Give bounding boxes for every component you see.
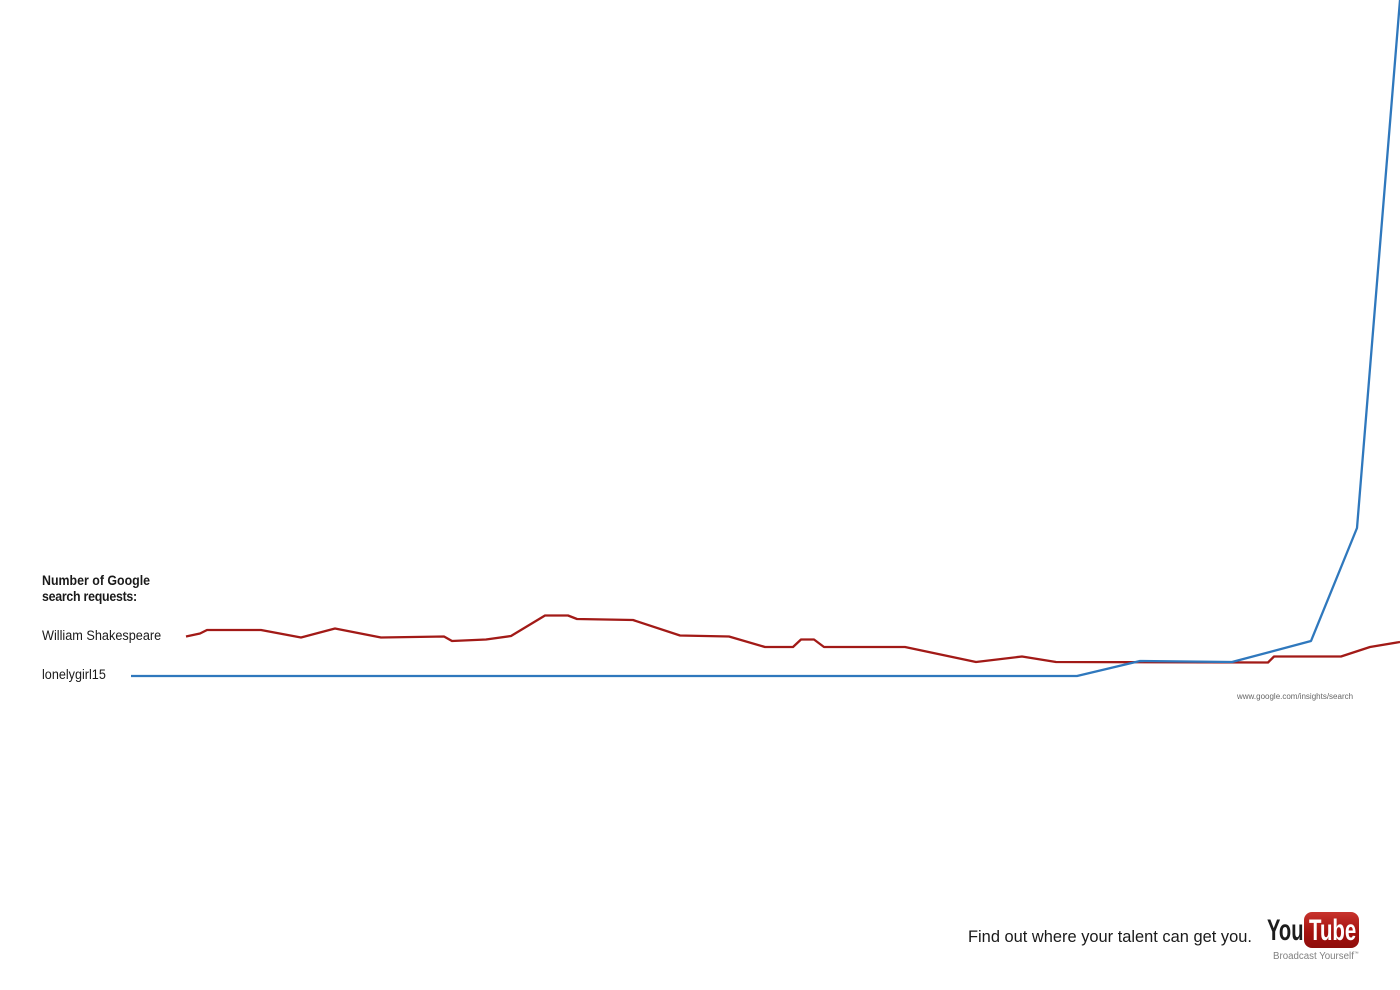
series: lonelygirl15	[131, 0, 1400, 676]
series: William Shakespeare	[186, 616, 1400, 662]
chart heading	[42, 572, 150, 604]
logo word: You: You	[1267, 914, 1303, 947]
chart heading: Number of Google	[42, 572, 150, 588]
label: lonelygirl15: lonelygirl15	[42, 667, 106, 682]
youtube logo	[1267, 912, 1359, 962]
source url: www.google.com/insights/search	[1237, 692, 1353, 701]
logo badge: Tube: Tube	[1309, 914, 1356, 947]
label: William Shakespeare: William Shakespeare	[42, 628, 161, 643]
chart heading: search requests:	[42, 588, 137, 604]
tagline: Find out where your talent can get you.	[968, 927, 1252, 946]
logo slogan: Broadcast Yourself™	[1273, 951, 1359, 962]
